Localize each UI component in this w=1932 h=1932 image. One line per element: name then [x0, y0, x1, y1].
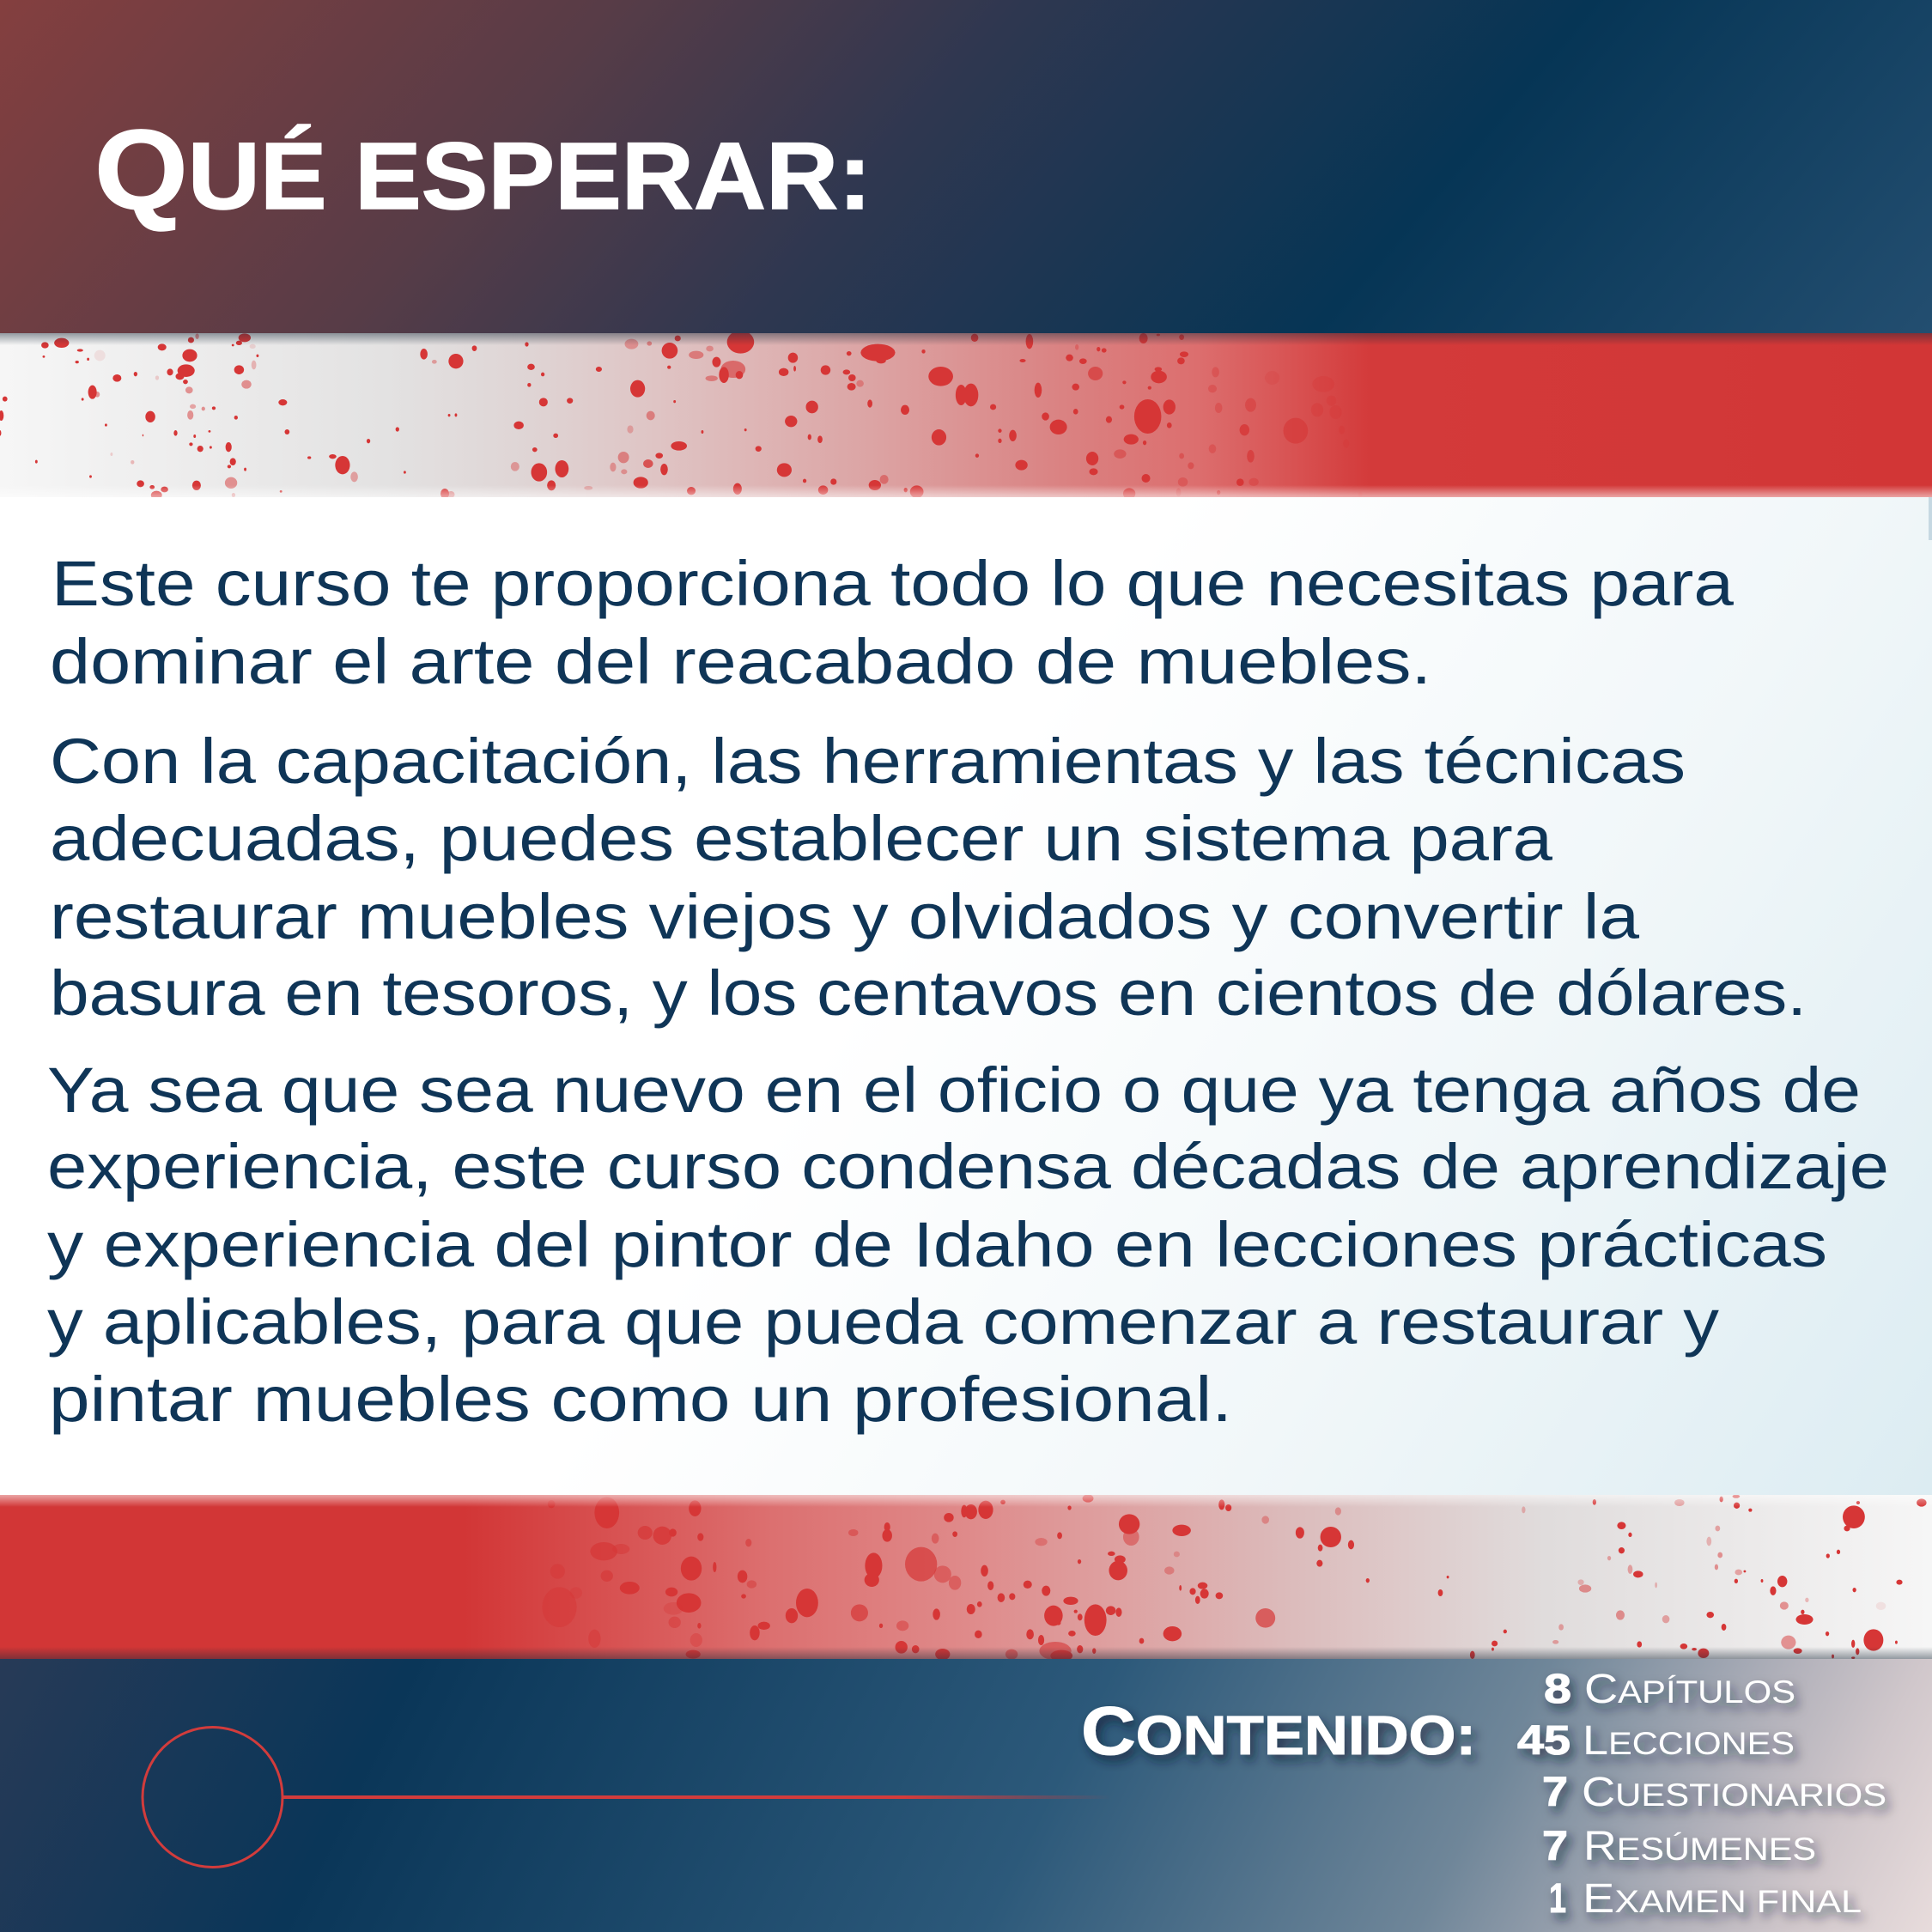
paint splatter: top band left	[0, 331, 967, 500]
body paragraph 2: restaurar muebles viejos y olvidados y convertir la	[50, 881, 1640, 952]
paint splatter: top band right	[963, 333, 1362, 500]
paint splatter: bottom band right	[965, 1494, 1927, 1662]
item: cuestionarios: 7	[1542, 1770, 1568, 1815]
item: lecciones: LECCIONES	[1583, 1718, 1795, 1764]
body paragraph 2: adecuadas, puedes establecer un sistema para	[50, 803, 1553, 874]
item: examen final: 1	[1549, 1876, 1566, 1922]
body paragraph 1	[50, 548, 1735, 697]
title: QUÉ ESPERAR:	[94, 106, 872, 233]
body paragraph 2: basura en tesoros, y los centavos en cientos de dólares.	[50, 957, 1807, 1029]
paint splatter: bottom band left	[542, 1497, 967, 1660]
item: resúmenes: RESÚMENES	[1583, 1824, 1816, 1869]
body paragraph 3: y aplicables, para que pueda comenzar a restaurar y	[47, 1286, 1719, 1358]
footer panel	[0, 1659, 1932, 1932]
body paragraph 2	[50, 726, 1807, 1029]
connector line	[283, 1795, 1112, 1799]
body paragraph 3	[47, 1054, 1889, 1435]
item: resúmenes: 7	[1542, 1824, 1568, 1869]
item: capítulos: 8	[1544, 1667, 1571, 1712]
body paragraph 1: dominar el arte del reacabado de muebles.	[50, 626, 1431, 697]
contenido heading: CONTENIDO:	[1081, 1692, 1476, 1769]
text panel	[0, 497, 1932, 1495]
body paragraph 3: Ya sea que sea nuevo en el oficio o que ya tenga años de	[47, 1054, 1861, 1126]
item: capítulos: CAPÍTULOS	[1584, 1667, 1795, 1712]
header panel	[0, 0, 1932, 333]
body paragraph 3: experiencia, este curso condensa décadas de aprendizaje	[47, 1131, 1889, 1202]
body paragraph 2: Con la capacitación, las herramientas y las técnicas	[50, 726, 1686, 797]
contents list	[1517, 1667, 1886, 1922]
top splatter band	[0, 331, 1932, 500]
item: lecciones: 45	[1517, 1718, 1571, 1764]
item: cuestionarios: CUESTIONARIOS	[1582, 1770, 1886, 1815]
item: examen final: EXAMEN FINAL	[1583, 1876, 1862, 1922]
body paragraph 3: y experiencia del pintor de Idaho en lecciones prácticas	[47, 1209, 1827, 1280]
body paragraph 3: pintar muebles como un profesional.	[49, 1364, 1232, 1435]
body paragraph 1: Este curso te proporciona todo lo que necesitas para	[52, 548, 1735, 619]
icon: empty circle	[143, 1728, 283, 1867]
bottom splatter band	[0, 1494, 1932, 1662]
item: lecciones	[1517, 1718, 1795, 1764]
